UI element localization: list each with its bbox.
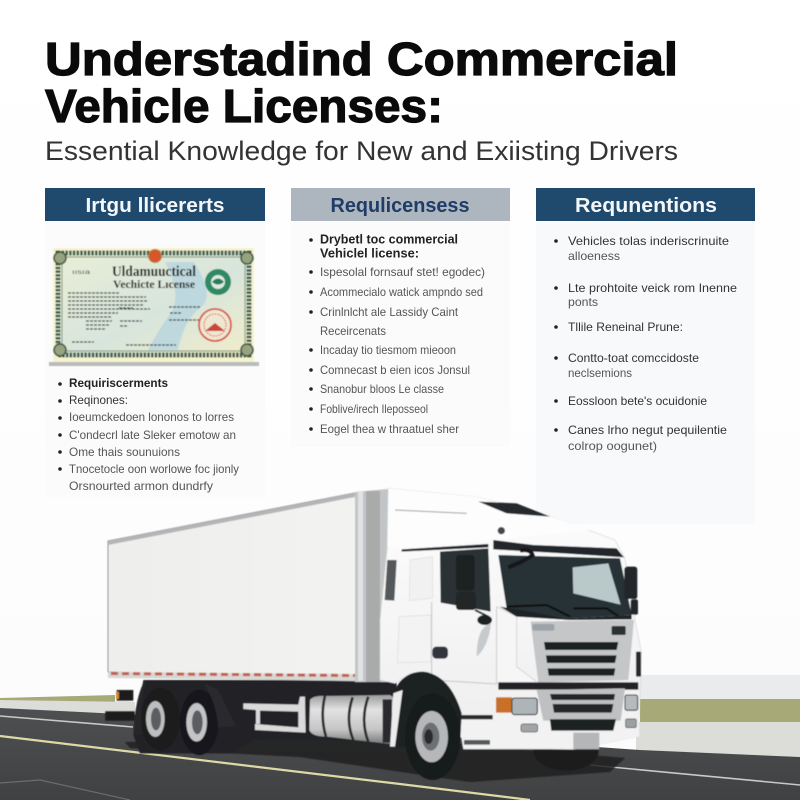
right column list: Eossloon bete's ocuidonie [568, 394, 707, 408]
left column list [58, 376, 239, 493]
windscreen [498, 555, 632, 619]
right column list: alloeness [568, 249, 620, 263]
sun visor [493, 540, 624, 557]
door mirror [456, 555, 492, 625]
right column list: neclsemions [568, 366, 632, 380]
headlight [496, 697, 512, 713]
license certificate image: ıısıa [72, 270, 91, 276]
wheel arch [390, 672, 462, 747]
right column list: Tllile Reneinal Prune: [568, 320, 683, 334]
roof vent [478, 502, 550, 517]
middle column heading: Requlicensess [330, 195, 470, 217]
rear wheel two [180, 690, 219, 755]
left column list: Tnocetocle oon worlowe foc jionly [69, 462, 239, 476]
right column heading: Requnentions [575, 195, 717, 217]
road surface [0, 708, 800, 800]
tractor cab [380, 488, 642, 780]
rear axle and trailer chassis [105, 680, 397, 755]
license plate [573, 733, 599, 749]
left column list: Ioeumckedoen lononos to lorres [69, 410, 234, 424]
front right wheel [533, 731, 599, 771]
license certificate image [49, 248, 259, 366]
subtitle: Essential Knowledge for New and Exiisting Drivers [45, 136, 678, 166]
right column list: Vehicles tolas inderiscrinuite [568, 234, 729, 248]
right column list: ponts [568, 295, 598, 309]
marker light strip [108, 672, 355, 681]
interior mirror [508, 550, 533, 567]
middle column list: Foblive/irech Ileposseol [320, 402, 428, 416]
bumper [458, 652, 641, 749]
lower dark gap [498, 682, 638, 690]
middle column list: Crinlnlcht ale Lassidy Caint [320, 305, 459, 319]
mudguard [204, 683, 236, 727]
black cab stripe [402, 544, 488, 552]
left column list: Ome thais sounuions [69, 445, 180, 459]
grass verge [0, 695, 800, 723]
right column list: Canes lrho negut pequilentie [568, 423, 727, 437]
side step bar [243, 697, 306, 733]
ground shadow [125, 738, 625, 782]
license certificate image: Vechicte Lıcense [113, 277, 196, 291]
left column list: Reqinones: [69, 393, 128, 407]
left column heading [45, 188, 265, 221]
right column heading [536, 188, 755, 221]
middle column heading [291, 188, 510, 221]
title [45, 33, 678, 132]
truck illustration [105, 488, 642, 782]
pavement [0, 700, 800, 757]
door window [440, 548, 491, 612]
road scene [0, 675, 800, 800]
middle column list: Acommecialo watick ampndo sed [320, 285, 483, 299]
middle column list: Vehiclel license: [320, 246, 419, 260]
cab body [380, 488, 642, 749]
right column list [554, 234, 737, 453]
middle column list: Receircenats [320, 324, 386, 338]
left column list: Requiriscerments [69, 376, 168, 390]
right column list: colrop oogunet) [568, 439, 657, 453]
upper grille [531, 620, 634, 682]
middle column list: Ispesolal fornsauf stet! egodec) [320, 265, 485, 279]
right column list: Contto-toat comccidoste [568, 351, 699, 365]
license certificate image: Uldamuuctical [112, 264, 196, 280]
side vent [385, 560, 397, 601]
door and panel shading [409, 557, 433, 601]
rear wheel one [141, 688, 180, 750]
title: Vehicle Licenses: [45, 80, 443, 132]
middle column list [309, 232, 485, 436]
middle column list: Incaday tio tiesmom mieoon [320, 343, 456, 357]
fuel tank [309, 695, 395, 744]
middle column list: Eogel thea w thraatuel sher [320, 422, 459, 436]
panel: left column [45, 188, 265, 497]
title: Understadind Commercial [45, 33, 678, 85]
left column heading: Irtgu llicererts [86, 195, 224, 217]
middle column list: Drybetl toc commercial [320, 232, 458, 246]
panel: middle column [291, 188, 510, 447]
right mirror [624, 567, 638, 615]
left column list: Orsnourted armon dundrfy [69, 479, 213, 493]
right column list: Lte prohtoite veick rom Inenne [568, 281, 737, 295]
middle column list: Comnecast b eien icos Jonsul [320, 363, 470, 377]
door handle [432, 647, 448, 659]
left column list: C'ondecrl late Sleker emotow an [69, 428, 236, 442]
panel: right column [536, 188, 755, 524]
front wheel [405, 693, 460, 780]
roadside fence [640, 675, 800, 700]
road lines [0, 716, 800, 800]
box end pillar [355, 489, 388, 682]
middle column list: Snanobur bloos Le classe [320, 382, 444, 396]
cargo box [108, 489, 388, 682]
